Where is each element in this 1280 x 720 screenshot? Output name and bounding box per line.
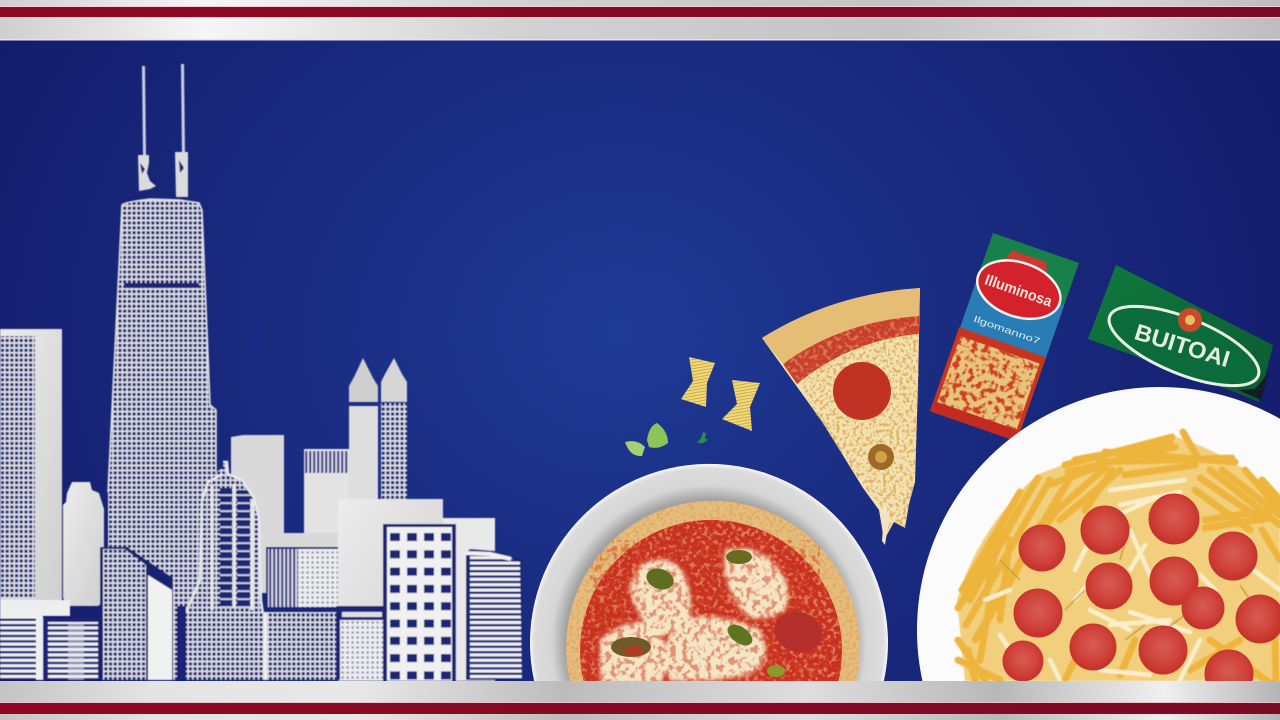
label: red oval brand (969, 242, 1071, 329)
building: rear pale block (231, 435, 284, 593)
building: small setback block (63, 482, 104, 606)
band: top silver and red stripes (0, 0, 1280, 40)
band: bottom silver and red stripes (0, 681, 1280, 720)
label: red oval brand: Illuminosa (982, 272, 1055, 311)
building: connecting block (266, 533, 341, 553)
building: ornamental tower (186, 462, 263, 614)
building: twin spire left (349, 358, 378, 501)
pizza slice: pepperoni with melting cheese (762, 288, 920, 545)
building: wide white block (338, 499, 443, 681)
icon: basil leaves (625, 423, 668, 456)
label: green oval brand: BUITOAI (1132, 319, 1233, 372)
package: green pasta box (1088, 265, 1273, 402)
building: right white block (443, 518, 495, 681)
package: pizza box with red label (930, 233, 1079, 441)
text: blue strip caption: Ilgomanno7 (972, 314, 1042, 346)
building: twin spire right (381, 358, 407, 500)
pasta: farfalle bow right (722, 380, 760, 431)
pizza: whole with sauce and cheese (566, 501, 860, 685)
building: low grid base (177, 606, 388, 680)
icon: small herb sprig (697, 432, 708, 443)
building: left tower (0, 329, 62, 601)
plate: pasta with pepperoni (917, 387, 1280, 698)
building: central striped and grid pair (266, 547, 338, 609)
toppings: pepperoni slices (1003, 494, 1280, 698)
toppings: olives and pepperoni slice (611, 550, 826, 677)
building: angled grid block (100, 547, 173, 680)
pasta: farfalle bow left (681, 357, 715, 407)
building: notched tower (304, 449, 352, 539)
building: lower left striped base (0, 600, 100, 680)
building: large window block (383, 524, 456, 681)
label: green oval brand (1099, 290, 1269, 402)
pasta: strands (957, 432, 1280, 690)
plate: pizza on round plate (530, 464, 888, 685)
building: John Hancock tower (108, 64, 216, 680)
building: curved striped tower (465, 549, 522, 680)
skyline: Chicago buildings (0, 64, 522, 681)
